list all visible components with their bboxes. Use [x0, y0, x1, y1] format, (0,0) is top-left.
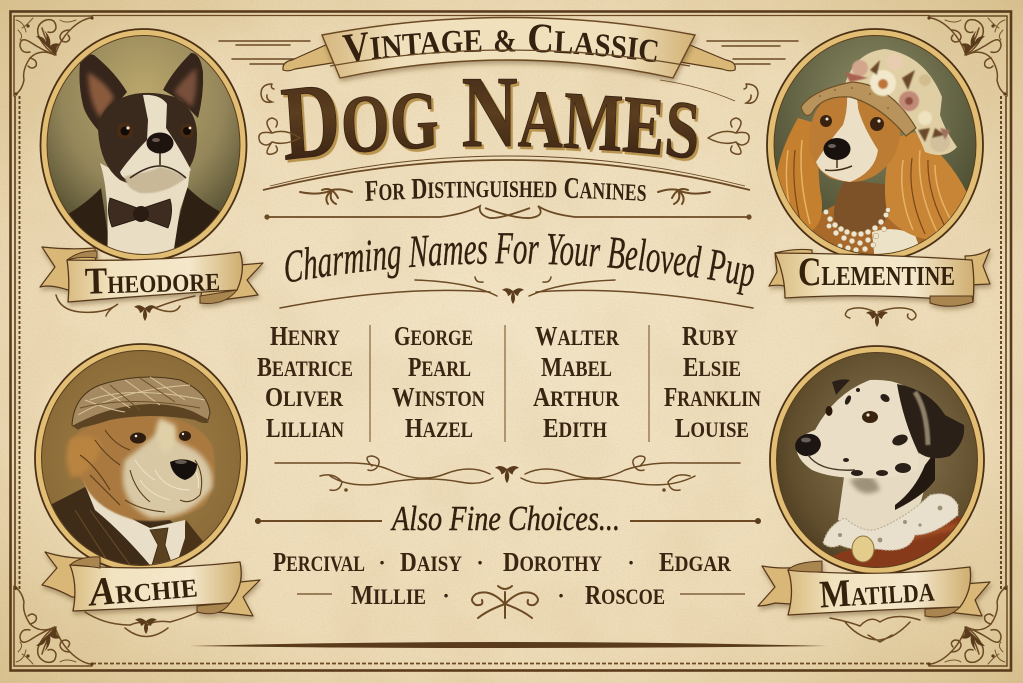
ribbon flourish: Matilda	[830, 616, 920, 642]
ribbon name text: Archie	[85, 560, 199, 615]
flat cap	[72, 377, 210, 429]
name list column 1: Oliver	[265, 377, 344, 413]
name list column 2: George	[394, 316, 473, 352]
name column dividers	[370, 325, 649, 442]
extra names row 1: Percival	[273, 542, 365, 578]
small ornament between names	[472, 586, 538, 618]
dog illustration	[776, 49, 975, 262]
banner tails	[283, 43, 735, 71]
lace collar	[823, 494, 958, 550]
medal	[852, 536, 874, 562]
name list column 2: Pearl	[408, 347, 471, 383]
extra names row 1: ·	[378, 550, 386, 575]
pearls	[823, 208, 890, 253]
ribbon flourish: Archie	[85, 612, 198, 636]
name list column 4: Elsie	[683, 347, 741, 383]
ribbon name text: Matilda	[818, 567, 936, 617]
name ribbon: Theodore	[40, 247, 263, 303]
oval frame	[40, 29, 246, 261]
hat	[845, 49, 957, 155]
name ribbon: Archie	[42, 552, 260, 616]
corner ornament: bottom left	[14, 586, 94, 666]
ribbon flourish: Clementine	[845, 308, 916, 327]
portrait: Clementine, spaniel in floral hat	[767, 29, 983, 262]
name list column 3: Walter	[535, 316, 620, 352]
name ribbon: Clementine	[769, 249, 990, 306]
ribbon flourish: Theodore	[56, 295, 195, 321]
dog illustration	[69, 53, 220, 254]
extra names row 2: ·	[557, 583, 565, 608]
tagline underline ornament	[280, 277, 753, 308]
name list column 2	[392, 316, 485, 444]
corner ornament: top right	[927, 16, 1007, 96]
name list column 1: Lillian	[266, 408, 344, 444]
name list column 1: Beatrice	[257, 347, 353, 383]
extra names row 1: Edgar	[659, 542, 732, 578]
name ribbon: Matilda	[758, 561, 990, 617]
script tagline: Charming Names For Your Beloved Pup	[285, 233, 754, 296]
name list column 2: Hazel	[405, 408, 473, 444]
corner ornament: bottom right	[927, 586, 1007, 666]
corner ornament: top left	[14, 16, 94, 96]
portrait: Theodore, Boston terrier	[40, 29, 246, 265]
ribbon name text: Theodore	[84, 257, 220, 303]
name list column 4: Ruby	[682, 316, 738, 352]
extra names row 2: Millie	[351, 575, 426, 611]
name list column 2: Winston	[392, 377, 485, 413]
subtitle ornaments	[300, 189, 710, 204]
name list column 4	[664, 316, 761, 444]
oval frame	[770, 346, 984, 574]
dog illustration	[52, 376, 216, 565]
bottom tapered rule	[190, 642, 827, 648]
ribbon name text: Clementine	[798, 249, 955, 294]
name list column 3	[533, 316, 620, 444]
divider with central knot	[264, 206, 752, 220]
extra names row 1: ·	[476, 550, 484, 575]
dog illustration	[795, 379, 964, 567]
oval frame	[35, 344, 247, 572]
portrait: Matilda, dalmatian in lace collar	[770, 346, 984, 574]
banner heading text: Vintage & Classic	[342, 24, 658, 62]
central flourish divider	[275, 456, 740, 492]
portrait: Archie, terrier in flat cap	[35, 344, 247, 572]
rules beside Also Fine Choices	[255, 518, 761, 524]
oval frame	[767, 29, 983, 261]
extra names row 1: Daisy	[400, 542, 462, 578]
name list column 4: Franklin	[664, 377, 761, 413]
title banner: Vintage & Classic	[282, 16, 736, 84]
name list column 4: Louise	[675, 408, 749, 444]
extra names row 2: ·	[442, 583, 450, 608]
title flourishes left and right	[259, 84, 758, 154]
name list column 1: Henry	[270, 316, 340, 352]
extra names row 1: ·	[627, 550, 635, 575]
script heading: Also Fine Choices: Also Fine Choices...	[390, 499, 620, 538]
banner body	[322, 18, 695, 78]
extra names row 1	[273, 542, 732, 578]
name list column 1	[257, 316, 353, 444]
extra names row 1: Dorothy	[503, 542, 602, 578]
name list column 3: Arthur	[533, 377, 620, 413]
name list column 3: Edith	[543, 408, 607, 444]
main heading: Dog Names: Dog Names	[280, 78, 700, 163]
arched rules under title	[263, 50, 750, 190]
extra names row 2: Roscoe	[585, 575, 665, 611]
subtitle: For Distinguished Canines: For Distinguished Canines	[364, 178, 646, 201]
header side rules	[219, 41, 798, 64]
extra names row 2	[297, 575, 745, 611]
name list column 3: Mabel	[541, 347, 612, 383]
